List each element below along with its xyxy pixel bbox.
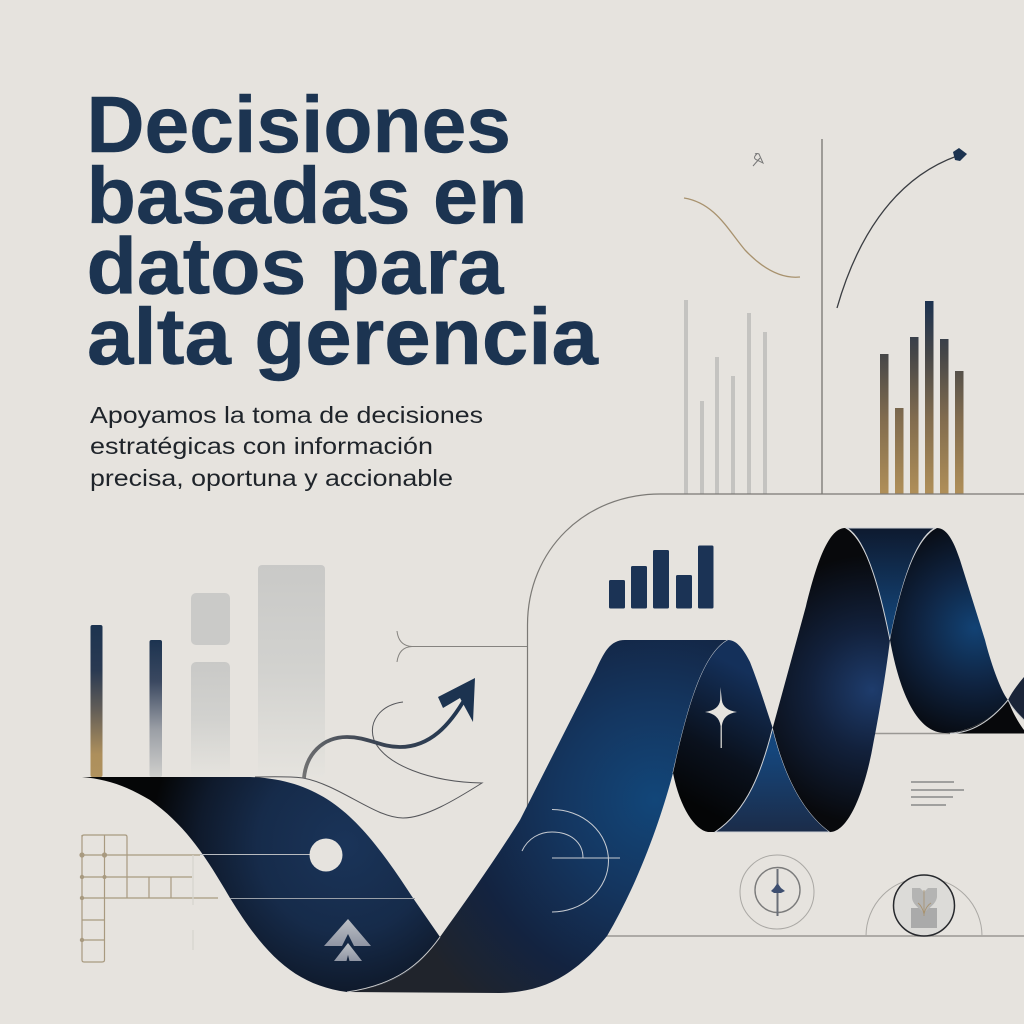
title: Decisiones [86, 80, 511, 169]
ribbon: tall band [773, 528, 890, 832]
ribbon lower line [230, 898, 415, 900]
icon: four-point star [705, 687, 737, 748]
line chart: descending gold curve [684, 198, 800, 277]
rounded panel outline [528, 494, 1024, 820]
subtitle: precisa, oportuna y accionable [90, 465, 453, 491]
ribbon: upper triangle fold [847, 528, 935, 640]
icon: small arrow glyph [753, 154, 763, 166]
ribbon: right band [890, 528, 1008, 733]
subtitle: estratégicas con información [90, 433, 433, 459]
subtitle [90, 402, 483, 491]
ribbon: rising band [347, 640, 728, 993]
ribbon: loop with star [673, 640, 773, 832]
arrow: growth [304, 678, 475, 778]
ribbon arcs icon [522, 810, 620, 912]
icon: emblem circle [866, 875, 982, 936]
mid line [870, 732, 950, 734]
bar chart: thin gray bars [684, 300, 767, 494]
icon: up arrows [324, 919, 371, 961]
title [86, 80, 599, 381]
panel baseline [600, 935, 1024, 937]
ribbon line with circle [200, 838, 342, 872]
vertical axis line [821, 139, 823, 494]
ribbon: first wave [82, 777, 440, 992]
line chart: rising curve with marker [837, 148, 967, 308]
ribbon: lower triangle fold [715, 728, 830, 832]
bar chart: left gradient and gray bars [90, 565, 325, 777]
icon: text lines [911, 782, 964, 805]
title: datos para [86, 222, 504, 310]
connector fork [397, 631, 527, 662]
title: alta gerencia [87, 292, 599, 381]
ribbon: right edge fold [945, 677, 1024, 734]
bar chart: navy to gold bars [880, 301, 964, 494]
title: basadas en [86, 151, 528, 240]
grid diagram [79, 835, 218, 962]
icon: small bar chart [609, 546, 714, 608]
icon: compass circle [740, 855, 814, 929]
thin flowing curve [255, 702, 482, 818]
subtitle: Apoyamos la toma de decisiones [90, 402, 483, 428]
